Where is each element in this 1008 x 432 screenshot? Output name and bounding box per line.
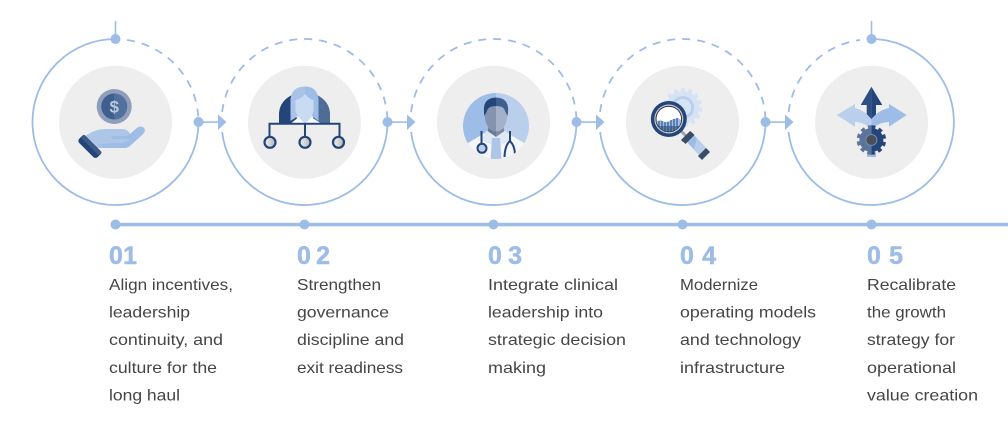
step 1 description: continuity, and — [109, 332, 223, 349]
step 5 number: 05 — [867, 242, 903, 270]
icon: leadership org chart — [264, 86, 344, 148]
step 1 number: 01 — [109, 242, 137, 270]
step 2 description: discipline and — [297, 332, 404, 349]
panel: step 4 ring — [600, 39, 794, 205]
step 1 description: leadership — [109, 305, 190, 322]
step 1 description — [109, 277, 233, 404]
step 4 description: and technology — [680, 332, 801, 349]
panel: step 5 ring — [788, 21, 954, 205]
step 5 description: Recalibrate — [867, 277, 956, 294]
timeline rule — [110, 220, 1008, 230]
step 3 description — [488, 277, 626, 377]
icon: diverging arrows and gear — [837, 87, 907, 157]
step 4 number: 04 — [680, 242, 716, 270]
step 4 description — [680, 277, 816, 377]
step 2 number: 02 — [297, 242, 330, 270]
icon: hand holding dollar coin — [77, 89, 145, 159]
step 3 description: leadership into — [488, 305, 603, 322]
step 3 description: strategic decision — [488, 332, 626, 349]
step 1 description: culture for the — [109, 360, 217, 377]
step 3 description: making — [488, 360, 546, 377]
step 3 number: 03 — [488, 242, 522, 270]
step 4 description: operating models — [680, 305, 816, 322]
step 5 description: the growth — [867, 305, 946, 322]
step 3 description: Integrate clinical — [488, 277, 618, 294]
step 2 description: exit readiness — [297, 360, 403, 377]
step 2 description: governance — [297, 305, 389, 322]
icon: magnifier over gear — [651, 90, 710, 160]
icon: hand holding dollar coin: $ — [109, 98, 119, 116]
step 2 description — [297, 277, 404, 377]
step 5 description: operational — [867, 360, 956, 377]
step 5 description: strategy for — [867, 332, 956, 349]
icon: doctor portrait — [463, 93, 529, 160]
step 5 description — [867, 277, 978, 404]
step 4 description: infrastructure — [680, 360, 785, 377]
step 5 description: value creation — [867, 387, 978, 404]
step 4 description: Modernize — [680, 277, 758, 294]
step 2 description: Strengthen — [297, 277, 381, 294]
panel: step 3 ring — [411, 39, 604, 205]
panel: step 1 ring — [32, 21, 226, 205]
step 1 description: Align incentives, — [109, 277, 233, 294]
panel: step 2 ring — [222, 39, 416, 205]
step 1 description: long haul — [109, 387, 180, 404]
